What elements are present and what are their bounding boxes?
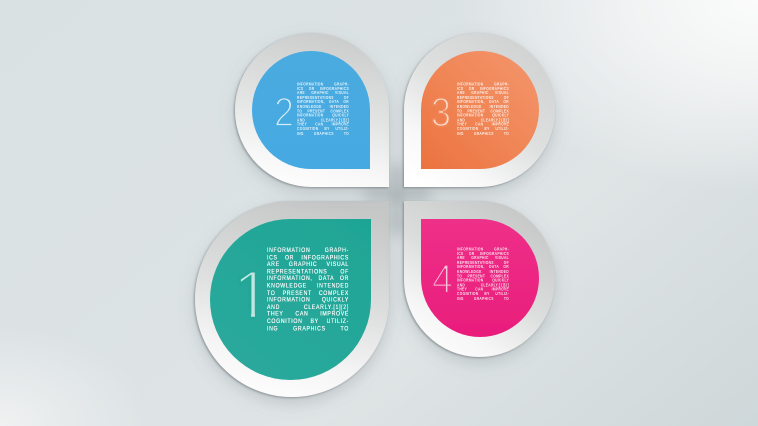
text block 1: COGNITION BY UTILIZ- — [267, 318, 349, 325]
text block 3 — [457, 82, 509, 136]
number 2: 2 — [274, 89, 294, 135]
text block 4: ICS OR INFOGRAPHICS — [457, 252, 509, 256]
teardrop shape 3 — [400, 32, 560, 198]
text block 1: INFORMATION, DATA OR — [267, 275, 349, 283]
text block 2: INFORMATION GRAPH- — [297, 82, 349, 87]
text block 1: TO PRESENT COMPLEX — [267, 289, 349, 297]
text block 3: INFORMATION GRAPH- — [457, 82, 509, 87]
teardrop shape 2 — [230, 32, 394, 198]
text block 3: INFORMATION, DATA OR — [457, 100, 509, 105]
text block 1: INFORMATION QUICKLY — [267, 296, 349, 304]
text block 1: REPRESENTATIONS OF — [267, 268, 349, 276]
text block 1: KNOWLEDGE INTENDED — [267, 282, 349, 290]
text block 3: KNOWLEDGE INTENDED — [457, 105, 509, 109]
text block 4: REPRESENTATIONS OF — [457, 261, 509, 265]
text block 4: INFORMATION QUICKLY — [457, 279, 509, 283]
text block 4: INFORMATION, DATA OR — [457, 265, 509, 270]
text block 2: THEY CAN IMPROVE — [297, 122, 349, 127]
text block 2: KNOWLEDGE INTENDED — [297, 105, 349, 109]
text block 4: AND CLEARLY.[1][2] — [457, 283, 509, 288]
shadow: cross-shaped gap between the panels — [362, 162, 433, 239]
text block 4: THEY CAN IMPROVE — [457, 287, 509, 292]
text block 3: COGNITION BY UTILIZ- — [457, 127, 509, 132]
panel 2: blue teardrop — [230, 32, 394, 198]
text block 2: INFORMATION, DATA OR — [297, 100, 349, 105]
text block 2: ING GRAPHICS TO — [297, 131, 349, 136]
text block 3: ICS OR INFOGRAPHICS — [457, 87, 509, 91]
text block 4: ING GRAPHICS TO — [457, 296, 509, 301]
text block 1: AND CLEARLY.[1][2] — [267, 304, 349, 311]
text block 2: ARE GRAPHIC VISUAL — [297, 91, 349, 96]
text block 4: ARE GRAPHIC VISUAL — [457, 256, 509, 261]
text block 1: INFORMATION GRAPH- — [267, 247, 349, 254]
text block 2 — [297, 82, 349, 136]
text block 3: REPRESENTATIONS OF — [457, 96, 509, 100]
text block 2: INFORMATION QUICKLY — [297, 114, 349, 118]
text block 3: AND CLEARLY.[1][2] — [457, 118, 509, 123]
text block 3: TO PRESENT COMPLEX — [457, 109, 509, 114]
panel 3: orange teardrop — [400, 32, 560, 198]
text block 3: INFORMATION QUICKLY — [457, 114, 509, 118]
text block 1: THEY CAN IMPROVE — [267, 311, 349, 318]
number 3: 3 — [431, 89, 451, 135]
text block 3: THEY CAN IMPROVE — [457, 122, 509, 127]
text block 4: COGNITION BY UTILIZ- — [457, 292, 509, 297]
text block 2: REPRESENTATIONS OF — [297, 96, 349, 100]
text block 4: TO PRESENT COMPLEX — [457, 274, 509, 279]
text block 2: ICS OR INFOGRAPHICS — [297, 87, 349, 91]
text block 2: COGNITION BY UTILIZ- — [297, 127, 349, 132]
text block 4: KNOWLEDGE INTENDED — [457, 270, 509, 274]
number 4: 4 — [432, 256, 453, 302]
text block 2: AND CLEARLY.[1][2] — [297, 118, 349, 123]
text block 1 — [266, 247, 349, 332]
text block 1: ING GRAPHICS TO — [267, 325, 349, 332]
text block 4 — [457, 247, 509, 301]
text block 1: ARE GRAPHIC VISUAL — [267, 261, 349, 269]
teardrop shape 1 — [190, 200, 394, 408]
text block 3: ING GRAPHICS TO — [457, 131, 509, 136]
text block 3: ARE GRAPHIC VISUAL — [457, 91, 509, 96]
number 1: 1 — [233, 257, 271, 333]
text block 4: INFORMATION GRAPH- — [457, 247, 509, 252]
teardrop shape 4 — [400, 200, 560, 367]
text block 1: ICS OR INFOGRAPHICS — [267, 254, 349, 261]
panel 4: pink teardrop — [400, 200, 560, 367]
text block 2: TO PRESENT COMPLEX — [297, 109, 349, 114]
panel 1: teal teardrop — [190, 200, 394, 408]
